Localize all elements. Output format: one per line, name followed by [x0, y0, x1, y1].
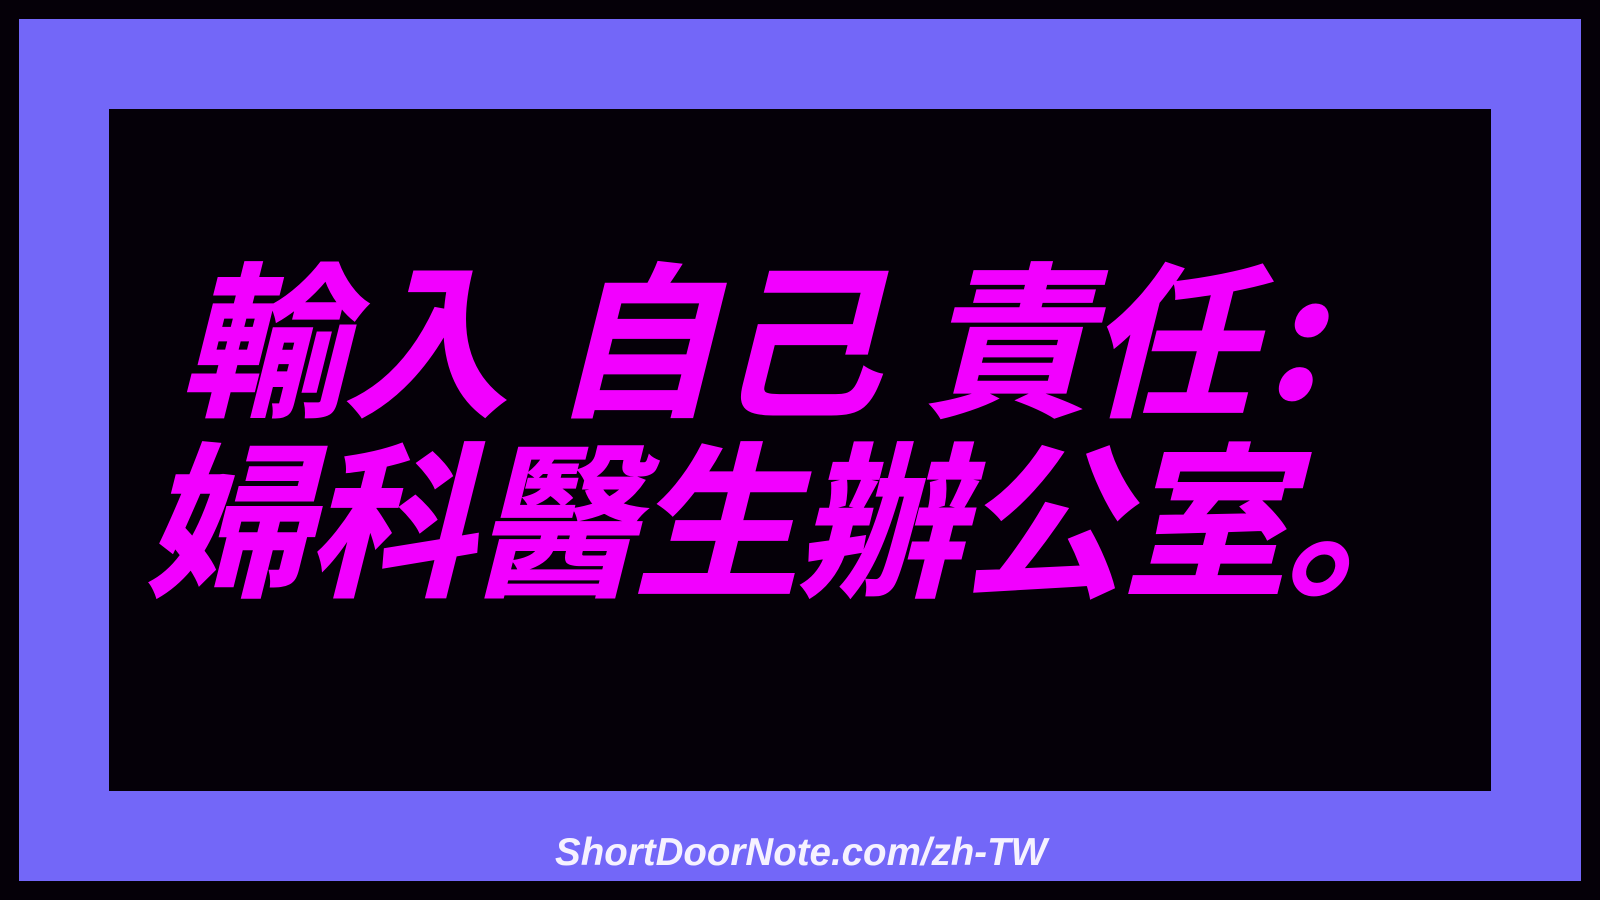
website footer text: ShortDoorNote.com/zh-TW: [555, 831, 1047, 874]
panel: black inner panel: [109, 109, 1491, 791]
heading colon: :: [1265, 204, 1320, 447]
heading line 2: 婦科醫生辦公室。: [144, 390, 1448, 631]
title: [144, 204, 1448, 631]
heading line 1: 輸入 自己 責任: [180, 210, 1249, 451]
